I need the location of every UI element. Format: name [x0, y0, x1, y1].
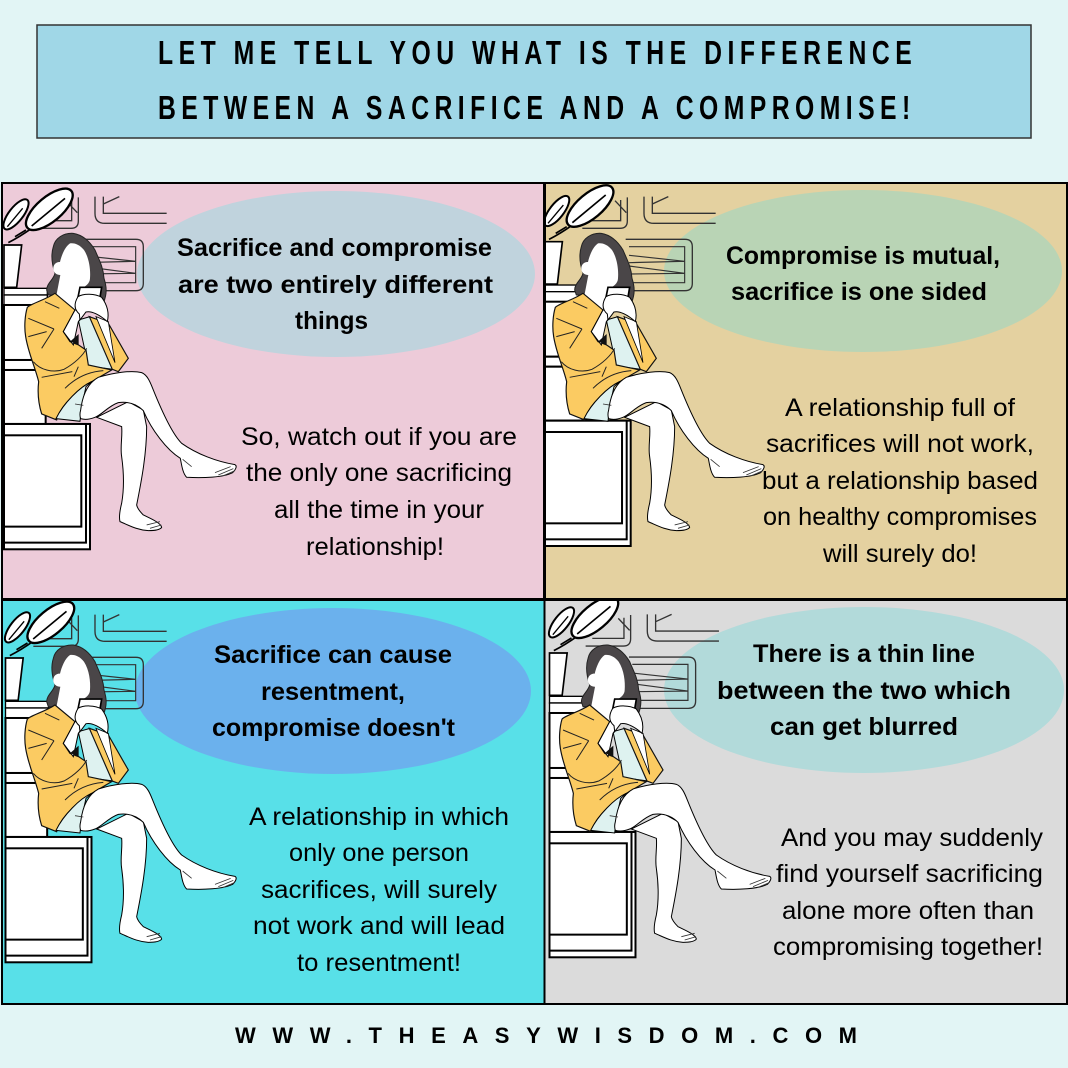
body text: And you may suddenly	[781, 824, 1044, 852]
body text: relationship!	[306, 533, 444, 561]
heading: There is a thin line	[753, 640, 975, 668]
heading	[726, 242, 1000, 306]
heading: are two entirely different	[178, 271, 494, 299]
heading: things	[295, 307, 368, 335]
heading: can get blurred	[770, 713, 958, 741]
footer website: WWW.THEASYWISDOM.COM	[235, 1023, 857, 1048]
title banner	[37, 25, 1031, 138]
body text: only one person	[289, 839, 469, 867]
heading: Sacrifice can cause	[214, 641, 452, 669]
body text: the only one sacrificing	[246, 459, 512, 487]
panel: compromise is mutual	[540, 178, 1067, 599]
title banner: LET ME TELL YOU WHAT IS THE DIFFERENCE	[158, 36, 912, 72]
speech ellipse	[137, 191, 535, 357]
heading	[212, 641, 456, 742]
body text: but a relationship based	[762, 467, 1038, 495]
body text	[241, 423, 517, 561]
heading: compromise doesn't	[212, 714, 456, 742]
body text: will surely do!	[822, 540, 977, 568]
heading	[717, 640, 1011, 741]
illustration: woman with cup	[545, 589, 771, 957]
body text: not work and will lead	[253, 912, 505, 940]
heading: resentment,	[261, 678, 405, 706]
body text: compromising together!	[773, 933, 1043, 961]
illustration: woman with cup	[0, 181, 236, 549]
body text	[249, 803, 509, 977]
heading	[177, 234, 494, 335]
speech ellipse	[664, 190, 1062, 352]
speech ellipse	[664, 607, 1064, 773]
illustration: woman with cup	[540, 178, 764, 546]
heading: Compromise is mutual,	[726, 242, 1000, 270]
body text: A relationship full of	[785, 394, 1015, 422]
body text: sacrifices will not work,	[766, 430, 1034, 458]
panel: sacrifice and compromise are different	[0, 181, 544, 599]
body text: alone more often than	[782, 897, 1034, 925]
panel: sacrifice can cause resentment	[1, 594, 544, 1004]
heading: sacrifice is one sided	[731, 278, 987, 306]
body text: all the time in your	[274, 496, 484, 524]
body text: A relationship in which	[249, 803, 509, 831]
body text: on healthy compromises	[763, 503, 1037, 531]
body text: to resentment!	[297, 949, 461, 977]
heading: Sacrifice and compromise	[177, 234, 492, 262]
illustration: woman with cup	[1, 594, 236, 962]
speech ellipse	[135, 608, 531, 774]
body text	[773, 824, 1044, 961]
heading: between the two which	[717, 677, 1011, 705]
body text: So, watch out if you are	[241, 423, 517, 451]
body text	[762, 394, 1038, 568]
panel: thin line between the two	[545, 589, 1067, 1004]
body text: find yourself sacrificing	[776, 860, 1043, 888]
body text: sacrifices, will surely	[261, 876, 498, 904]
title banner: BETWEEN A SACRIFICE AND A COMPROMISE!	[158, 91, 910, 127]
